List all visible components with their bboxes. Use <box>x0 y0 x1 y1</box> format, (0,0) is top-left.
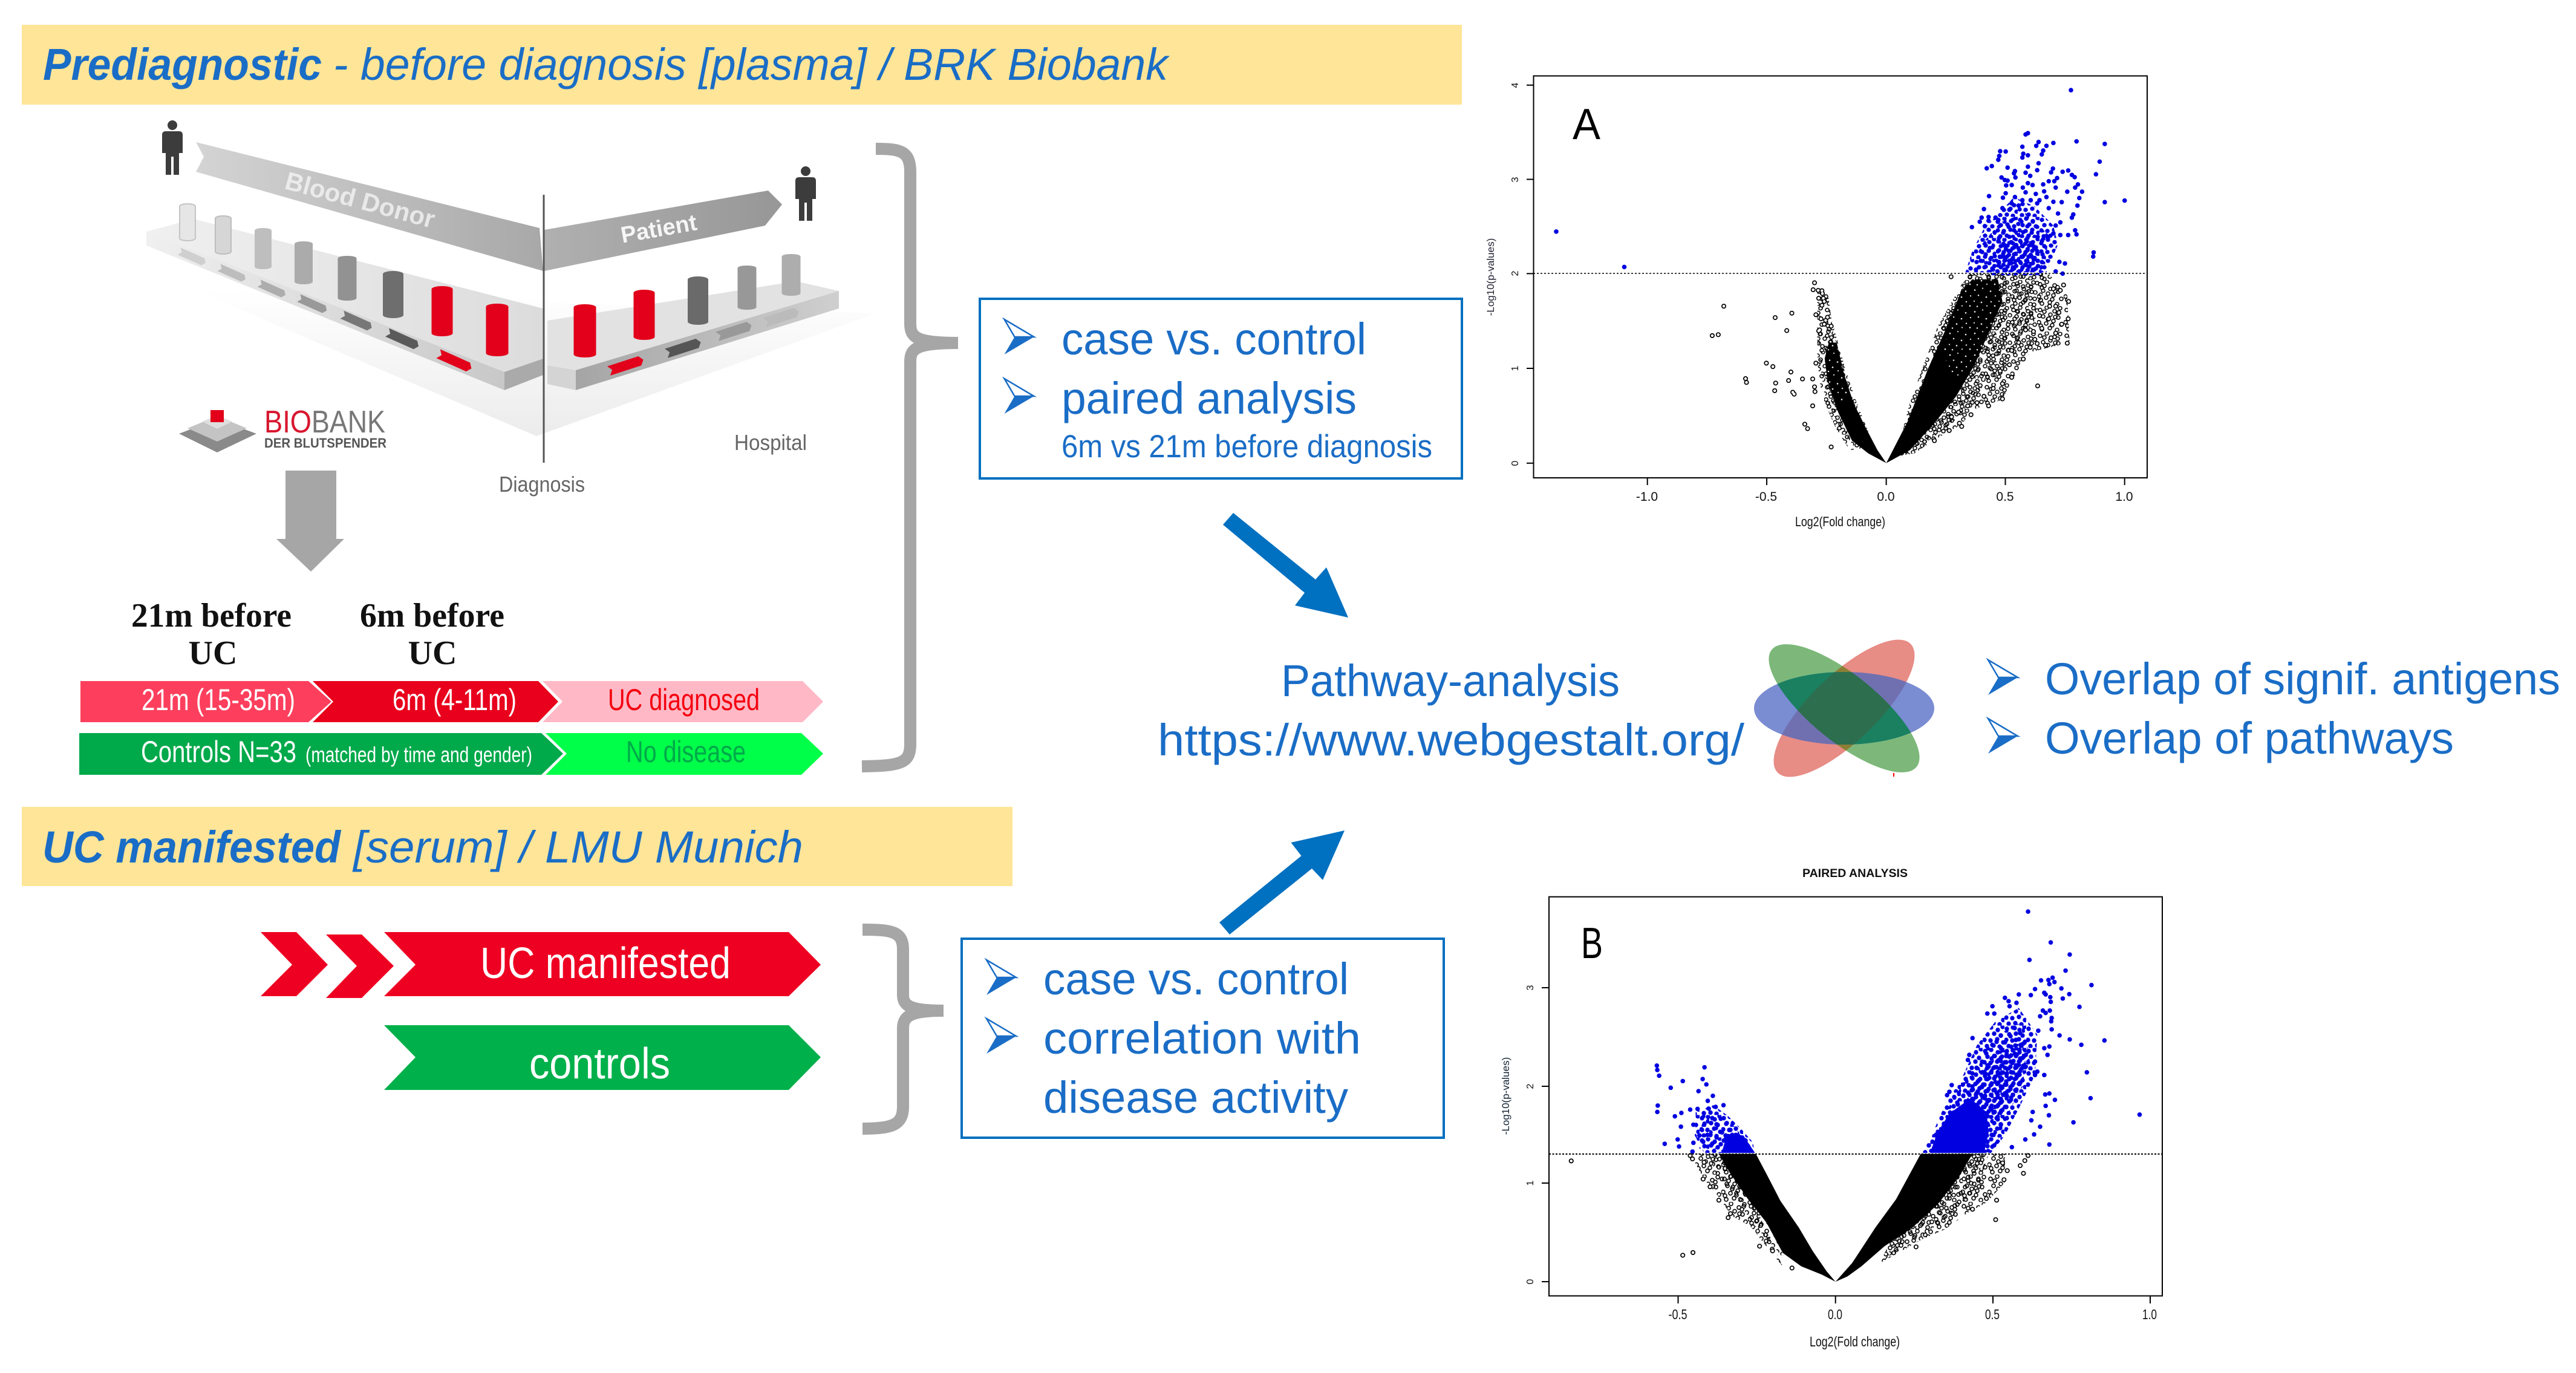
platform left <box>146 219 543 390</box>
timepoint label: 21m before UC: UC <box>189 634 237 672</box>
segment: No disease <box>546 733 823 775</box>
plot frame B <box>1549 897 2162 1296</box>
label: Diagnosis: Diagnosis <box>499 472 585 497</box>
arrow: controls: controls <box>529 1040 670 1088</box>
floor shadow <box>114 256 876 436</box>
threshold line A <box>1533 273 2147 274</box>
bullet <box>986 1019 1016 1054</box>
y axis labels A: 1 <box>1510 365 1521 371</box>
logo: Biobank der Blutspender <box>179 405 386 452</box>
y axis labels B: 2 <box>1525 1083 1536 1089</box>
axis ticks A <box>1527 85 2125 485</box>
timepoint label: 21m before UC: 21m before <box>131 597 292 634</box>
floor plates <box>177 247 800 376</box>
y axis labels A: 0 <box>1510 460 1521 466</box>
segment: Controls: (matched by time and gender) <box>305 742 532 767</box>
logo: Biobank der Blutspender: DER BLUTSPENDER <box>264 435 386 451</box>
threshold line B <box>1549 1153 2162 1155</box>
item: case vs. control: case vs. control <box>1061 314 1366 364</box>
arrow band: Patient <box>544 191 782 271</box>
y axis labels A <box>1510 82 1521 466</box>
logo: Biobank der Blutspender: BANK <box>311 405 385 440</box>
chart: volcano plot A <box>1485 76 2147 529</box>
timepoint label: 6m before UC <box>360 597 504 672</box>
label: Hospital: Hospital <box>734 430 807 455</box>
item: paired analysis: paired analysis <box>1061 373 1357 423</box>
bullet <box>986 960 1016 995</box>
bullet <box>1004 319 1034 354</box>
panel letter A: A <box>1573 100 1600 149</box>
segment: No disease: No disease <box>626 735 746 769</box>
x axis labels A: 1.0 <box>2115 490 2133 504</box>
timepoint label: 21m before UC <box>131 597 292 672</box>
timeline row: UC cases <box>80 681 823 722</box>
arrow: controls <box>384 1025 821 1090</box>
y axis labels A: 4 <box>1510 82 1521 88</box>
data points A <box>1556 90 2125 463</box>
y axis labels B <box>1525 985 1536 1284</box>
bullet <box>1988 719 2018 754</box>
x axis title A: Log2(Fold change) <box>1795 514 1885 529</box>
segment: 21m <box>80 681 331 722</box>
arrow band: Blood Donor: Blood Donor <box>282 166 438 233</box>
text: pathway analysis: Pathway-analysis <box>1281 656 1620 706</box>
panel letter B: B <box>1581 919 1603 968</box>
timepoint label: 6m before UC: UC <box>408 634 457 672</box>
segment: Controls: Controls N=33 <box>141 735 296 769</box>
y axis labels B: 0 <box>1525 1279 1536 1284</box>
x axis title B: Log2(Fold change) <box>1810 1334 1900 1349</box>
banner heading bold: UC manifested <box>42 822 342 872</box>
item: overlap of antigens: Overlap of signif. antigens <box>2045 654 2560 704</box>
bullet <box>1004 379 1034 414</box>
item: case vs. control: case vs. control <box>1043 954 1349 1004</box>
bullet <box>1988 660 2018 695</box>
box: manifested analyses <box>962 939 1444 1138</box>
x axis labels A <box>1636 490 2133 504</box>
plot title B: PAIRED ANALYSIS <box>1802 867 1908 880</box>
segment: 21m: 21m (15-35m) <box>142 683 295 717</box>
segment: 6m: 6m (4-11m) <box>393 683 517 717</box>
y axis title A: -Log10(p-values) <box>1485 238 1496 316</box>
arrow: to pathway analysis from above <box>1223 513 1348 618</box>
noise on dense black <box>1825 342 1850 403</box>
banner heading rest: - before diagnosis [plasma] / BRK Biobank <box>333 39 1170 90</box>
logo: Biobank der Blutspender: BIO <box>264 405 311 440</box>
platform right <box>547 281 839 390</box>
x axis labels A: 0.0 <box>1877 490 1895 504</box>
x axis labels B: 0.0 <box>1828 1306 1842 1322</box>
banner: Prediagnostic <box>22 25 1462 105</box>
banner heading bold: Prediagnostic <box>43 39 322 90</box>
y axis labels A: 2 <box>1510 270 1521 276</box>
x axis labels B: -0.5 <box>1668 1306 1687 1322</box>
icon: venn diagram <box>1754 640 1934 777</box>
y axis title B: -Log10(p-values) <box>1500 1057 1511 1135</box>
text: pathway analysis: https://www.webgestalt.org/ <box>1158 715 1744 765</box>
segment: UC diagnosed <box>543 681 823 722</box>
axis ticks B <box>1542 988 2150 1303</box>
x axis labels A: -0.5 <box>1755 490 1777 504</box>
banner: UC manifested <box>22 807 1012 886</box>
arrow: UC manifested: UC manifested <box>480 939 731 988</box>
icon: person left <box>162 120 183 175</box>
plot frame A <box>1534 76 2147 478</box>
x axis labels B <box>1668 1306 2157 1322</box>
diagnosis line <box>543 195 544 463</box>
icon: person right <box>795 166 816 221</box>
timeline row: controls <box>79 733 823 775</box>
y axis labels B: 1 <box>1525 1180 1536 1185</box>
text: pathway analysis <box>1158 656 1744 765</box>
x axis labels B: 1.0 <box>2142 1306 2157 1322</box>
x axis labels A: -1.0 <box>1636 490 1658 504</box>
segment: Controls <box>79 733 563 775</box>
arrow band: Blood Donor <box>196 142 543 271</box>
item: disease activity: disease activity <box>1043 1072 1348 1123</box>
sample tubes <box>180 204 801 357</box>
arrow: down to timeline <box>276 471 344 572</box>
banner heading rest: [serum] / LMU Munich <box>352 822 803 872</box>
segment: 6m <box>313 681 558 722</box>
x axis labels B: 0.5 <box>1985 1306 2000 1322</box>
x axis labels A: 0.5 <box>1996 490 2014 504</box>
diagram: blood donor to patient timeline <box>114 120 876 572</box>
segment: UC diagnosed: UC diagnosed <box>608 683 760 717</box>
arrow: to pathway analysis from below <box>1219 830 1345 934</box>
brace: manifested <box>862 930 944 1129</box>
sub-item: 6m vs 21m before diagnosis <box>1061 429 1432 465</box>
item: overlap of pathways: Overlap of pathways <box>2045 713 2454 763</box>
brace: prediagnostic <box>862 149 958 766</box>
y axis labels A: 3 <box>1510 177 1521 182</box>
item: correlation with: correlation with <box>1043 1013 1361 1063</box>
arrow band: Patient: Patient <box>619 210 699 249</box>
timepoint label: 6m before UC: 6m before <box>360 597 504 634</box>
chart: volcano plot B <box>1500 867 2162 1349</box>
box: prediagnostic analyses <box>980 299 1462 478</box>
list: overlap <box>1988 654 2560 763</box>
y axis labels B: 3 <box>1525 985 1536 990</box>
data points B <box>1571 912 2140 1282</box>
arrow: UC manifested <box>261 932 821 998</box>
